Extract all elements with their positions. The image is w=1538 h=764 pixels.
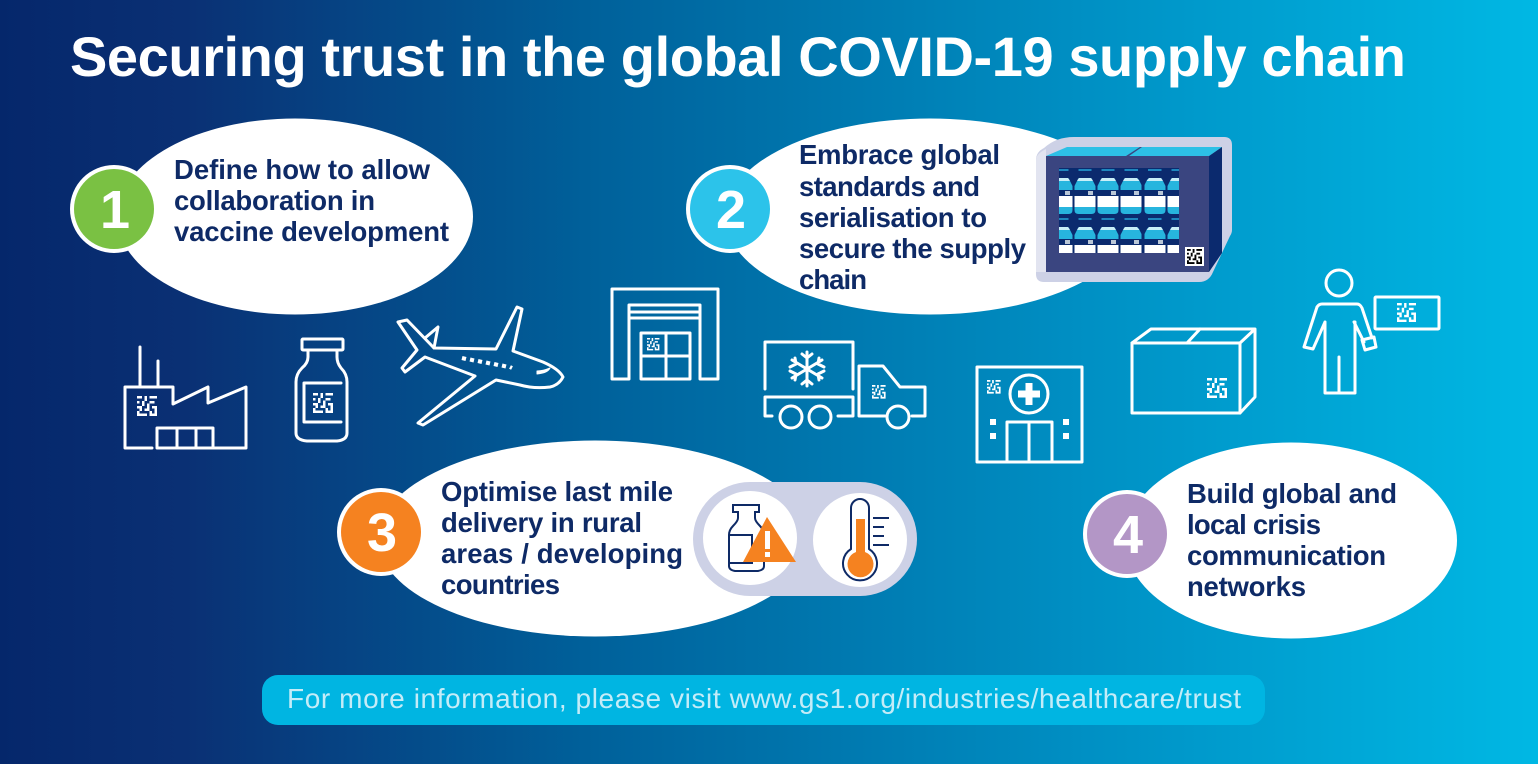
number badge 1: 1	[100, 180, 130, 240]
panel: step 3 last mile	[337, 440, 917, 636]
icon: warehouse	[612, 289, 718, 379]
bubble 3	[378, 440, 812, 636]
number badge 4: 4	[1113, 505, 1143, 565]
text 3: areas / developing	[441, 538, 683, 569]
text 3: countries	[441, 569, 560, 600]
icon: vial with warning triangle	[729, 505, 796, 571]
icon: person with scanner	[1304, 270, 1439, 393]
bubble 2	[725, 118, 1135, 314]
text 4: communication	[1187, 540, 1386, 571]
footer link bar: For more information, please visit www.gs1.org/industries/healthcare/trust	[287, 683, 1241, 714]
icon: refrigerated truck	[765, 342, 925, 428]
title: Securing trust in the global COVID-19 supply chain	[70, 25, 1406, 88]
bubble 1	[117, 118, 473, 314]
text 2: Embrace global	[799, 139, 1000, 170]
text 1: collaboration in	[174, 185, 375, 216]
text 4	[1187, 478, 1397, 602]
icon: thermometer	[843, 499, 889, 580]
text 1	[174, 154, 449, 247]
number badge 3: 3	[367, 503, 397, 563]
panel: step 2 standards	[686, 118, 1232, 314]
pill with warning icons	[693, 482, 917, 596]
icon: vial	[296, 339, 347, 441]
text 2: serialisation to	[799, 202, 987, 233]
icon: hospital	[977, 367, 1082, 462]
text 1: vaccine development	[174, 216, 449, 247]
text 4: local crisis	[1187, 509, 1321, 540]
bubble 4	[1125, 442, 1457, 638]
icon: airplane	[398, 307, 563, 425]
text 2: standards and	[799, 171, 980, 202]
number badge 4	[1083, 490, 1171, 578]
text 3: delivery in rural	[441, 507, 642, 538]
text 2: chain	[799, 264, 867, 295]
panel: step 4 crisis networks	[1083, 442, 1457, 638]
text 3: Optimise last mile	[441, 476, 673, 507]
number badge 2	[686, 165, 774, 253]
number badge 3	[337, 488, 425, 576]
footer link bar	[262, 675, 1265, 725]
snowflake	[790, 352, 824, 386]
text 2	[799, 139, 1027, 295]
number badge 1	[70, 165, 158, 253]
text 4: Build global and	[1187, 478, 1397, 509]
text 3	[441, 476, 683, 600]
icon: crate of serialised vials	[1036, 137, 1232, 282]
number badge 2: 2	[716, 180, 746, 240]
text 2: secure the supply	[799, 233, 1027, 264]
icon: shipping box	[1132, 329, 1255, 413]
panel: step 1 collaboration	[70, 118, 473, 314]
text 4: networks	[1187, 571, 1306, 602]
text 1: Define how to allow	[174, 154, 431, 185]
icon: factory	[125, 347, 246, 448]
